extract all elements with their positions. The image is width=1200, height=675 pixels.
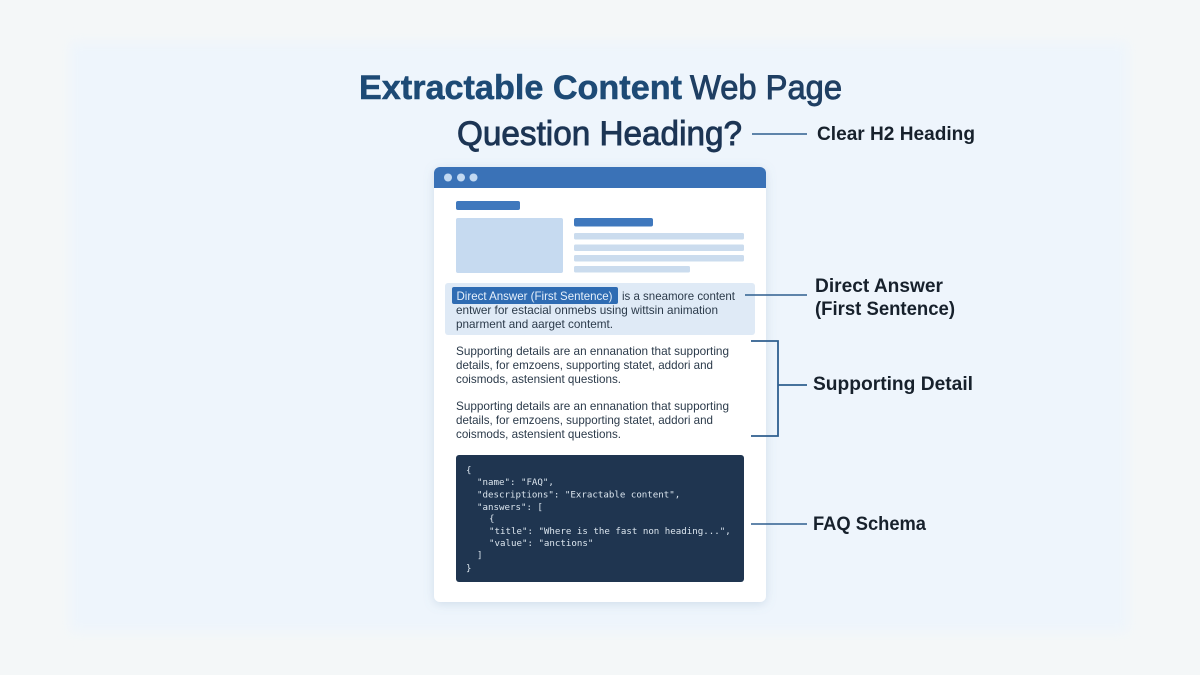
browser title bar bbox=[434, 167, 766, 188]
supporting paragraph 1: details, for emzoens, supporting statet, addori and bbox=[456, 358, 713, 372]
supporting paragraph 1: Supporting details are an ennanation that supporting bbox=[456, 344, 729, 358]
title: web page: Web Page bbox=[690, 69, 842, 107]
callout: supporting detail bracket: Supporting Detail bbox=[813, 373, 973, 395]
supporting paragraph 2: Supporting details are an ennanation that supporting bbox=[456, 399, 729, 413]
heading: question: Question Heading? bbox=[457, 115, 742, 153]
callout: direct answer: (First Sentence) bbox=[815, 298, 955, 320]
supporting paragraph 2: coismods, astensient questions. bbox=[456, 427, 621, 441]
callout: supporting detail bracket bbox=[751, 341, 973, 436]
code block: FAQ schema: { bbox=[489, 514, 494, 524]
code block: FAQ schema: "title": "Where is the fast non heading...", bbox=[489, 527, 731, 537]
code block: FAQ schema bbox=[456, 455, 744, 582]
direct answer block bbox=[445, 283, 755, 335]
window dots bbox=[444, 174, 478, 182]
supporting paragraph 2: details, for emzoens, supporting statet, addori and bbox=[456, 413, 713, 427]
code block: FAQ schema: ] bbox=[477, 551, 482, 561]
code block: FAQ schema: { bbox=[466, 466, 472, 476]
supporting paragraph 2 bbox=[456, 399, 729, 441]
answer line 3: pnarment and aarget contemt. bbox=[456, 317, 613, 331]
panel: browser window bbox=[434, 167, 766, 602]
answer line 1: is a sneamore content bbox=[622, 289, 736, 303]
callout: direct answer bbox=[745, 275, 955, 320]
code block: FAQ schema: "value": "anctions" bbox=[489, 539, 593, 549]
title: Extractable Content bbox=[359, 69, 682, 107]
supporting paragraph 1: coismods, astensient questions. bbox=[456, 372, 621, 386]
highlight text: Direct Answer (First Sentence) bbox=[456, 289, 612, 303]
direct answer highlight bbox=[452, 287, 618, 304]
supporting paragraph 1 bbox=[456, 344, 729, 386]
callout: direct answer: Direct Answer bbox=[815, 275, 943, 297]
subheading placeholder bbox=[574, 218, 653, 226]
callout: faq schema: FAQ Schema bbox=[813, 513, 926, 535]
background panel bbox=[70, 42, 1128, 632]
callout: clear h2 heading: Clear H2 Heading bbox=[817, 123, 975, 145]
code block: FAQ schema: "name": "FAQ", bbox=[477, 478, 554, 488]
answer line 2: entwer for estacial onmebs using wittsin animation bbox=[456, 303, 718, 317]
image placeholder bbox=[456, 218, 563, 273]
code block: FAQ schema: "descriptions": "Exractable content", bbox=[477, 490, 680, 500]
code block: FAQ schema: "answers": [ bbox=[477, 503, 543, 513]
header bar placeholder bbox=[456, 201, 520, 210]
code block: FAQ schema: } bbox=[466, 564, 472, 574]
text line placeholders bbox=[574, 233, 744, 272]
